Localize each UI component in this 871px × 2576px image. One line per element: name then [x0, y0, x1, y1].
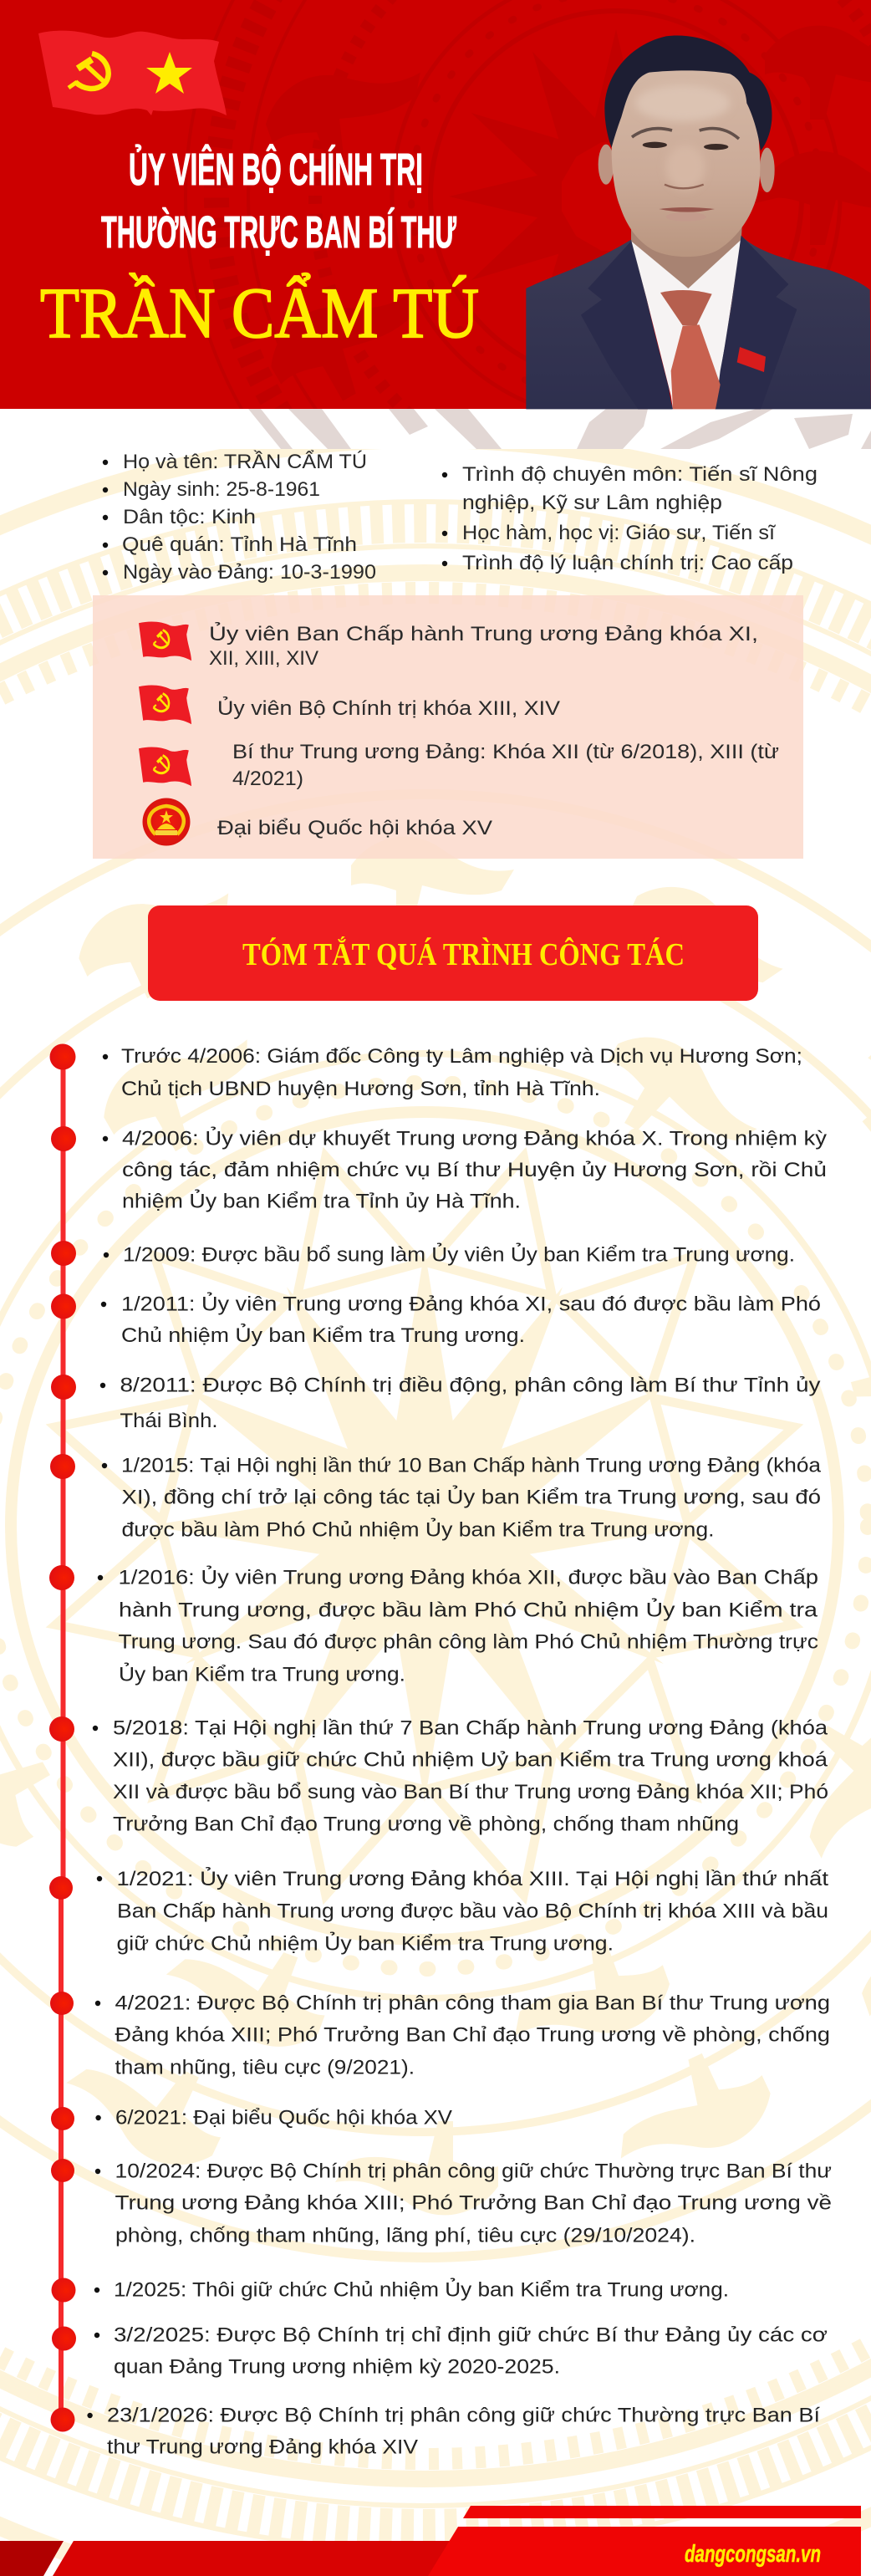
- panel: personal info left column: Ngày sinh: 25-8-1961: [123, 478, 320, 501]
- entry: 1/2011: Chủ nhiệm Ủy ban Kiểm tra Trung ương.: [121, 1323, 525, 1347]
- entry: 1/2021: giữ chức Chủ nhiệm Ủy ban Kiểm tra Trung ương.: [117, 1931, 614, 1955]
- position: central committee: XII, XIII, XIV: [209, 647, 319, 670]
- background: grey drum strip under header: [248, 409, 871, 449]
- panel: personal info right column: Học hàm, học vị: Giáo sư, Tiến sĩ: [462, 522, 776, 544]
- panel: personal info left column: Họ và tên: TRẦN CẨM TÚ: [123, 450, 367, 473]
- entry: 1/2021: 1/2021: Ủy viên Trung ương Đảng khóa XIII. Tại Hội nghị lần thứ nhất: [117, 1866, 828, 1890]
- entry: 23/1/2026: [87, 2405, 820, 2458]
- position: secretariat: [232, 741, 779, 790]
- face: [612, 64, 760, 257]
- section heading: career summary: TÓM TẮT QUÁ TRÌNH CÔNG TÁC: [242, 936, 685, 972]
- position: secretariat: 4/2021): [232, 768, 303, 790]
- header banner: [0, 0, 871, 410]
- entry: 4/2006: công tác, đảm nhiệm chức vụ Bí thư Huyện ủy Hương Sơn, rồi Chủ: [122, 1159, 827, 1181]
- entry: 4/2006: nhiệm Ủy ban Kiểm tra Tỉnh ủy Hà Tĩnh.: [122, 1189, 521, 1212]
- icon: party and national flag: [38, 31, 227, 115]
- position: central committee: [209, 621, 758, 670]
- tie: [660, 290, 721, 409]
- entry: 4/2006: 4/2006: Ủy viên dự khuyết Trung ương Đảng khóa X. Trong nhiệm kỳ: [122, 1125, 827, 1150]
- entry: 4/2021: 4/2021: Được Bộ Chính trị phân công tham gia Ban Bí thư Trung ương: [115, 1992, 830, 2015]
- panel: personal info right column: nghiệp, Kỹ sư Lâm nghiệp: [462, 492, 722, 514]
- panel: personal info left column: Dân tộc: Kinh: [123, 506, 256, 528]
- entry: 1/2016: Trung ương. Sau đó được phân công làm Phó Chủ nhiệm Thường trực: [119, 1630, 818, 1654]
- entry: 8/2011: 8/2011: Được Bộ Chính trị điều động, phân công làm Bí thư Tỉnh ủy: [120, 1375, 821, 1396]
- entry: 23/1/2026: thư Trung ương Đảng khóa XIV: [107, 2436, 418, 2458]
- entry: 4/2021: tham nhũng, tiêu cực (9/2021).: [115, 2057, 415, 2079]
- panel: personal info right column: [442, 463, 818, 574]
- entry: 5/2018: [93, 1717, 828, 1836]
- entry: 3/2/2025: 3/2/2025: Được Bộ Chính trị chỉ định giữ chức Bí thư Đảng ủy các cơ: [114, 2324, 828, 2346]
- entry: before 4/2006: Trước 4/2006: Giám đốc Công ty Lâm nghiệp và Dịch vụ Hương Sơn;: [121, 1045, 802, 1068]
- entry: 1/2009: 1/2009: Được bầu bổ sung làm Ủy viên Ủy ban Kiểm tra Trung ương.: [123, 1242, 795, 1266]
- entry: 10/2024: phòng, chống tham nhũng, lãng phí, tiêu cực (29/10/2024).: [115, 2224, 695, 2247]
- position: national assembly: Đại biểu Quốc hội khóa XV: [217, 817, 493, 839]
- entry: 1/2015: 1/2015: Tại Hội nghị lần thứ 10 Ban Chấp hành Trung ương Đảng (khóa: [121, 1455, 822, 1477]
- entry: 1/2016: Ủy ban Kiểm tra Trung ương.: [119, 1662, 405, 1686]
- section heading: career summary: [148, 905, 758, 1001]
- lapels: [581, 236, 797, 409]
- entry: 1/2015: XI), đồng chí trở lại công tác tại Ủy ban Kiểm tra Trung ương, sau đó: [122, 1485, 821, 1508]
- suit jacket: [526, 236, 871, 409]
- entry: 1/2025: 1/2025: Thôi giữ chức Chủ nhiệm Ủy ban Kiểm tra Trung ương.: [114, 2278, 729, 2301]
- title: position line 2: THƯỜNG TRỰC BAN BÍ THƯ: [101, 207, 456, 258]
- entry: 6/2021: 6/2021: Đại biểu Quốc hội khóa XV: [115, 2107, 452, 2129]
- entry: 3/2/2025: quan Đảng Trung ương nhiệm kỳ 2020-2025.: [114, 2356, 560, 2378]
- icon: national emblem: [142, 798, 191, 846]
- entry: 23/1/2026: 23/1/2026: Được Bộ Chính trị phân công giữ chức Thường trực Ban Bí: [107, 2405, 820, 2426]
- neck: [631, 217, 742, 290]
- footer band: [0, 2506, 861, 2576]
- icon: party flag 2: [139, 685, 191, 724]
- panel: party positions: [93, 595, 803, 859]
- shirt: [631, 240, 741, 409]
- position: politburo: Ủy viên Bộ Chính trị khóa XIII, XIV: [217, 696, 561, 720]
- entry: 1/2011: 1/2011: Ủy viên Trung ương Đảng khóa XI, sau đó được bầu làm Phó: [121, 1291, 821, 1316]
- entry: before 4/2006: Chủ tịch UBND huyện Hương Sơn, tỉnh Hà Tĩnh.: [121, 1078, 600, 1100]
- portrait: [526, 36, 871, 409]
- entry: 4/2006: [103, 1125, 827, 1212]
- icon: party flag 1: [139, 621, 191, 661]
- entry: 3/2/2025: [94, 2324, 828, 2378]
- panel: personal info left column: [103, 450, 376, 584]
- entry: 5/2018: 5/2018: Tại Hội nghị lần thứ 7 Ban Chấp hành Trung ương Đảng (khóa: [113, 1717, 828, 1739]
- timeline line and dots: [49, 1043, 76, 2431]
- ears: [598, 145, 775, 192]
- entry: 1/2016: 1/2016: Ủy viên Trung ương Đảng khóa XII, được bầu vào Ban Chấp: [119, 1565, 818, 1589]
- entry: 5/2018: XII), được bầu giữ chức Chủ nhiệm Uỷ ban Kiểm tra Trung ương khoá: [113, 1749, 828, 1771]
- entry: 1/2021: [97, 1866, 828, 1955]
- title: name: TRẦN CẨM TÚ: [40, 273, 479, 353]
- entry: 10/2024: 10/2024: Được Bộ Chính trị phân công giữ chức Thường trực Ban Bí thư: [115, 2160, 832, 2182]
- entry: 4/2021: [95, 1992, 830, 2079]
- entry: 8/2011: [100, 1375, 821, 1432]
- hair: [604, 36, 772, 150]
- position: central committee: Ủy viên Ban Chấp hành Trung ương Đảng khóa XI,: [209, 621, 758, 645]
- icon: party flag 3: [139, 747, 191, 786]
- entry: 1/2015: [102, 1455, 822, 1542]
- entry: 5/2018: Trưởng Ban Chỉ đạo Trung ương về phòng, chống tham nhũng: [113, 1813, 739, 1836]
- entry: 1/2016: hành Trung ương, được bầu làm Phó Chủ nhiệm Ủy ban Kiểm tra: [119, 1597, 818, 1622]
- entry: 8/2011: Thái Bình.: [120, 1410, 217, 1432]
- entry: 1/2016: [98, 1565, 818, 1686]
- entry: 1/2015: được bầu làm Phó Chủ nhiệm Ủy ban Kiểm tra Trung ương.: [122, 1517, 714, 1542]
- panel: personal info left column: Quê quán: Tỉnh Hà Tĩnh: [122, 533, 357, 556]
- entry: 10/2024: Trung ương Đảng khóa XIII; Phó Trưởng Ban Chỉ đạo Trung ương về: [115, 2192, 832, 2214]
- header drum pattern: [184, 0, 871, 409]
- entry: 4/2021: Đảng khóa XIII; Phó Trưởng Ban Chỉ đạo Trung ương về phòng, chống: [115, 2023, 830, 2047]
- panel: personal info right column: Trình độ chuyên môn: Tiến sĩ Nông: [462, 463, 818, 486]
- title: position line 1: ỦY VIÊN BỘ CHÍNH TRỊ: [129, 144, 423, 195]
- icon: lapel pin: [737, 347, 766, 372]
- icon: hammer and sickle: [69, 54, 109, 89]
- position: secretariat: Bí thư Trung ương Đảng: Khóa XII (từ 6/2018), XIII (từ: [232, 741, 779, 763]
- panel: personal info right column: Trình độ lý luận chính trị: Cao cấp: [462, 552, 793, 574]
- entry: before 4/2006: [103, 1045, 802, 1100]
- icon: yellow star: [146, 52, 192, 94]
- panel: personal info left column: Ngày vào Đảng: 10-3-1990: [123, 561, 376, 584]
- entry: 1/2021: Ban Chấp hành Trung ương được bầu vào Bộ Chính trị khóa XIII và bầu: [117, 1900, 828, 1923]
- entry: 5/2018: XII và được bầu bổ sung vào Ban Bí thư Trung ương Đảng khóa XII; Phó: [113, 1781, 828, 1803]
- entry: 1/2011: [101, 1291, 821, 1347]
- timeline entries: [87, 1045, 832, 2458]
- entry: 10/2024: [95, 2160, 832, 2247]
